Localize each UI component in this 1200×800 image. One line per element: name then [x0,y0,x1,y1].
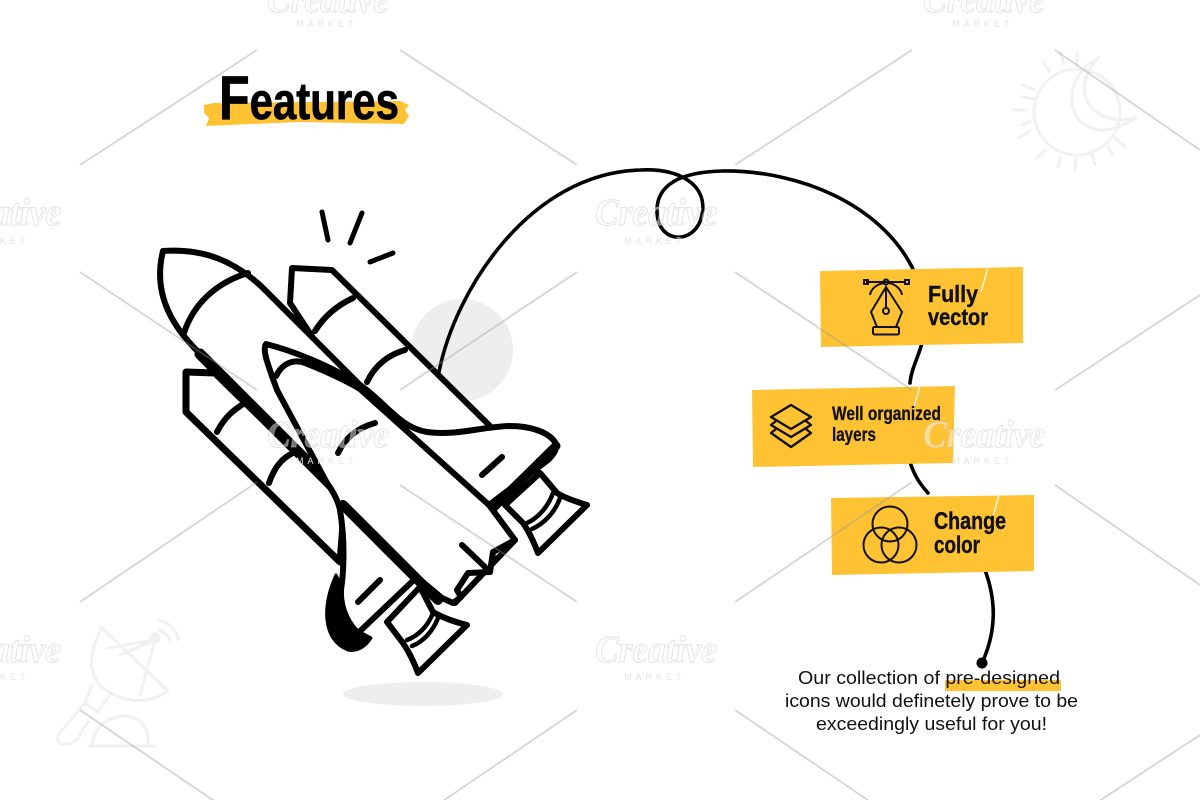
watermark: Market labels: MARKET [296,456,358,466]
icon: pen tool [864,280,909,334]
text: Change color: Change [934,508,1006,535]
text: Well organized layers: layers [832,425,876,446]
lower engine nozzle [387,587,467,673]
watermark: Market labels: MARKET [952,456,1014,466]
watermark: Creative Market: Creative [923,414,1045,456]
label: Well organized layers [752,386,955,467]
icon: faint sun and moon [1013,53,1137,170]
sparks [322,212,393,262]
label: Change color [831,495,1034,575]
caption: exceedingly useful for you! [816,714,1047,734]
rocket [160,212,587,673]
end dot [976,658,988,668]
text: Fully vector [928,281,988,330]
watermark: Market labels: MARKET [624,236,686,246]
orbiter [265,344,556,650]
connector curve [439,170,993,663]
title highlight brush [204,101,409,126]
rocket shadow [343,682,503,706]
text: Fully vector: Fully [928,281,978,307]
caption: icons would definetely prove to be [785,691,1078,711]
wing thick edge [327,575,371,650]
text: Change color [934,508,1006,559]
icon: overlapping circles [864,506,916,562]
watermark: Market labels: MARKET [296,19,358,29]
watermark: Creative Market: Creative [595,629,717,671]
text: Well organized layers: Well organized [832,404,941,425]
watermark: Market labels [0,19,1014,682]
caption [785,668,1078,734]
text: Fully vector: vector [928,304,988,330]
text: Well organized layers [832,404,941,446]
grey circle behind rocket [411,299,513,401]
watermark: Creative Market: Creative [267,414,389,456]
watermark: Creative Market: Creative [595,192,717,234]
title: Features: Features [219,64,399,133]
text: Change color: color [934,532,980,559]
right engine nozzle [505,473,587,553]
caption: Our collection of pre-designed [798,668,1060,688]
right booster [290,268,490,500]
icon: layers [771,405,811,447]
main tank [160,251,515,603]
watermark: Market labels: MARKET [624,672,686,682]
icon: faint satellite dish [57,620,178,746]
caption highlight [945,680,1061,691]
watermark: Market labels: MARKET [952,19,1014,29]
watermark: Creative Market [0,0,1045,671]
label: Fully vector [820,267,1023,347]
left booster [186,372,345,562]
